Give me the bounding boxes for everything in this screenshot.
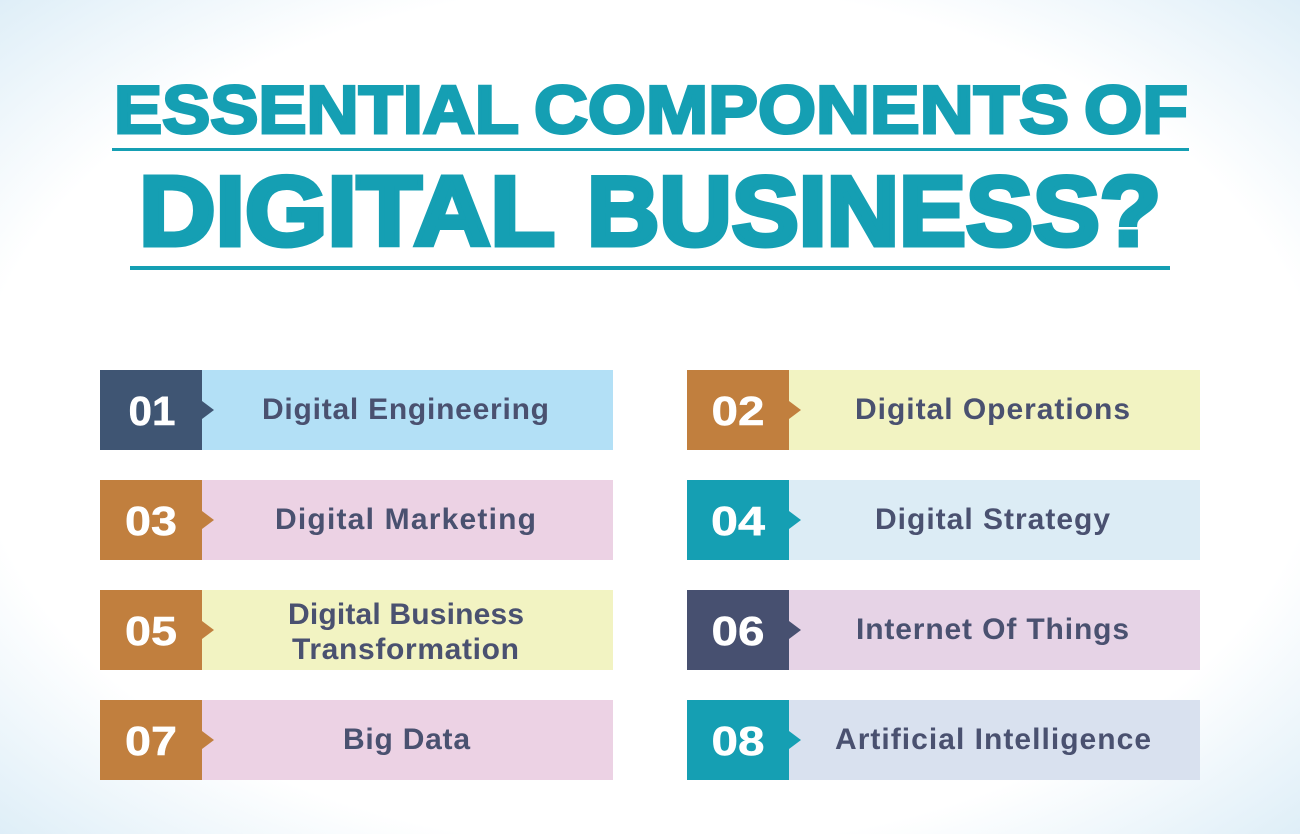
title <box>112 72 1189 270</box>
item 07: 07 <box>125 718 177 764</box>
item 02: 02 <box>712 388 764 434</box>
title rule 1 <box>112 148 1189 151</box>
item 06 <box>687 590 1200 670</box>
item 01: 01 <box>128 388 176 434</box>
item 04: Digital Strategy <box>875 503 1110 536</box>
item 04 <box>687 480 1200 560</box>
item 03: Digital Marketing <box>275 503 536 536</box>
item 08: 08 <box>712 718 764 764</box>
item 01 <box>100 370 613 450</box>
item 02 <box>687 370 1200 450</box>
item 05: Digital Business <box>288 598 524 631</box>
item 05: Transformation <box>292 633 519 666</box>
title rule 2 <box>130 266 1170 270</box>
title line 2: DIGITAL <box>139 156 555 266</box>
item 03: 03 <box>125 498 177 544</box>
item 06: 06 <box>712 608 764 654</box>
title: BUSINESS? <box>587 156 1161 266</box>
item 08: Artificial Intelligence <box>835 723 1151 756</box>
item 01: Digital Engineering <box>262 393 549 426</box>
item 07: Big Data <box>343 723 470 756</box>
title: OF <box>1084 72 1188 148</box>
item 08 <box>687 700 1200 780</box>
item 04: 04 <box>711 498 765 544</box>
item 07 <box>100 700 613 780</box>
item 02: Digital Operations <box>855 393 1130 426</box>
title: COMPONENTS <box>534 72 1069 148</box>
item 03 <box>100 480 613 560</box>
item 06: Internet Of Things <box>856 613 1129 646</box>
item 05 <box>100 590 613 670</box>
title line 1: ESSENTIAL <box>114 72 519 148</box>
item 05: 05 <box>125 608 177 654</box>
